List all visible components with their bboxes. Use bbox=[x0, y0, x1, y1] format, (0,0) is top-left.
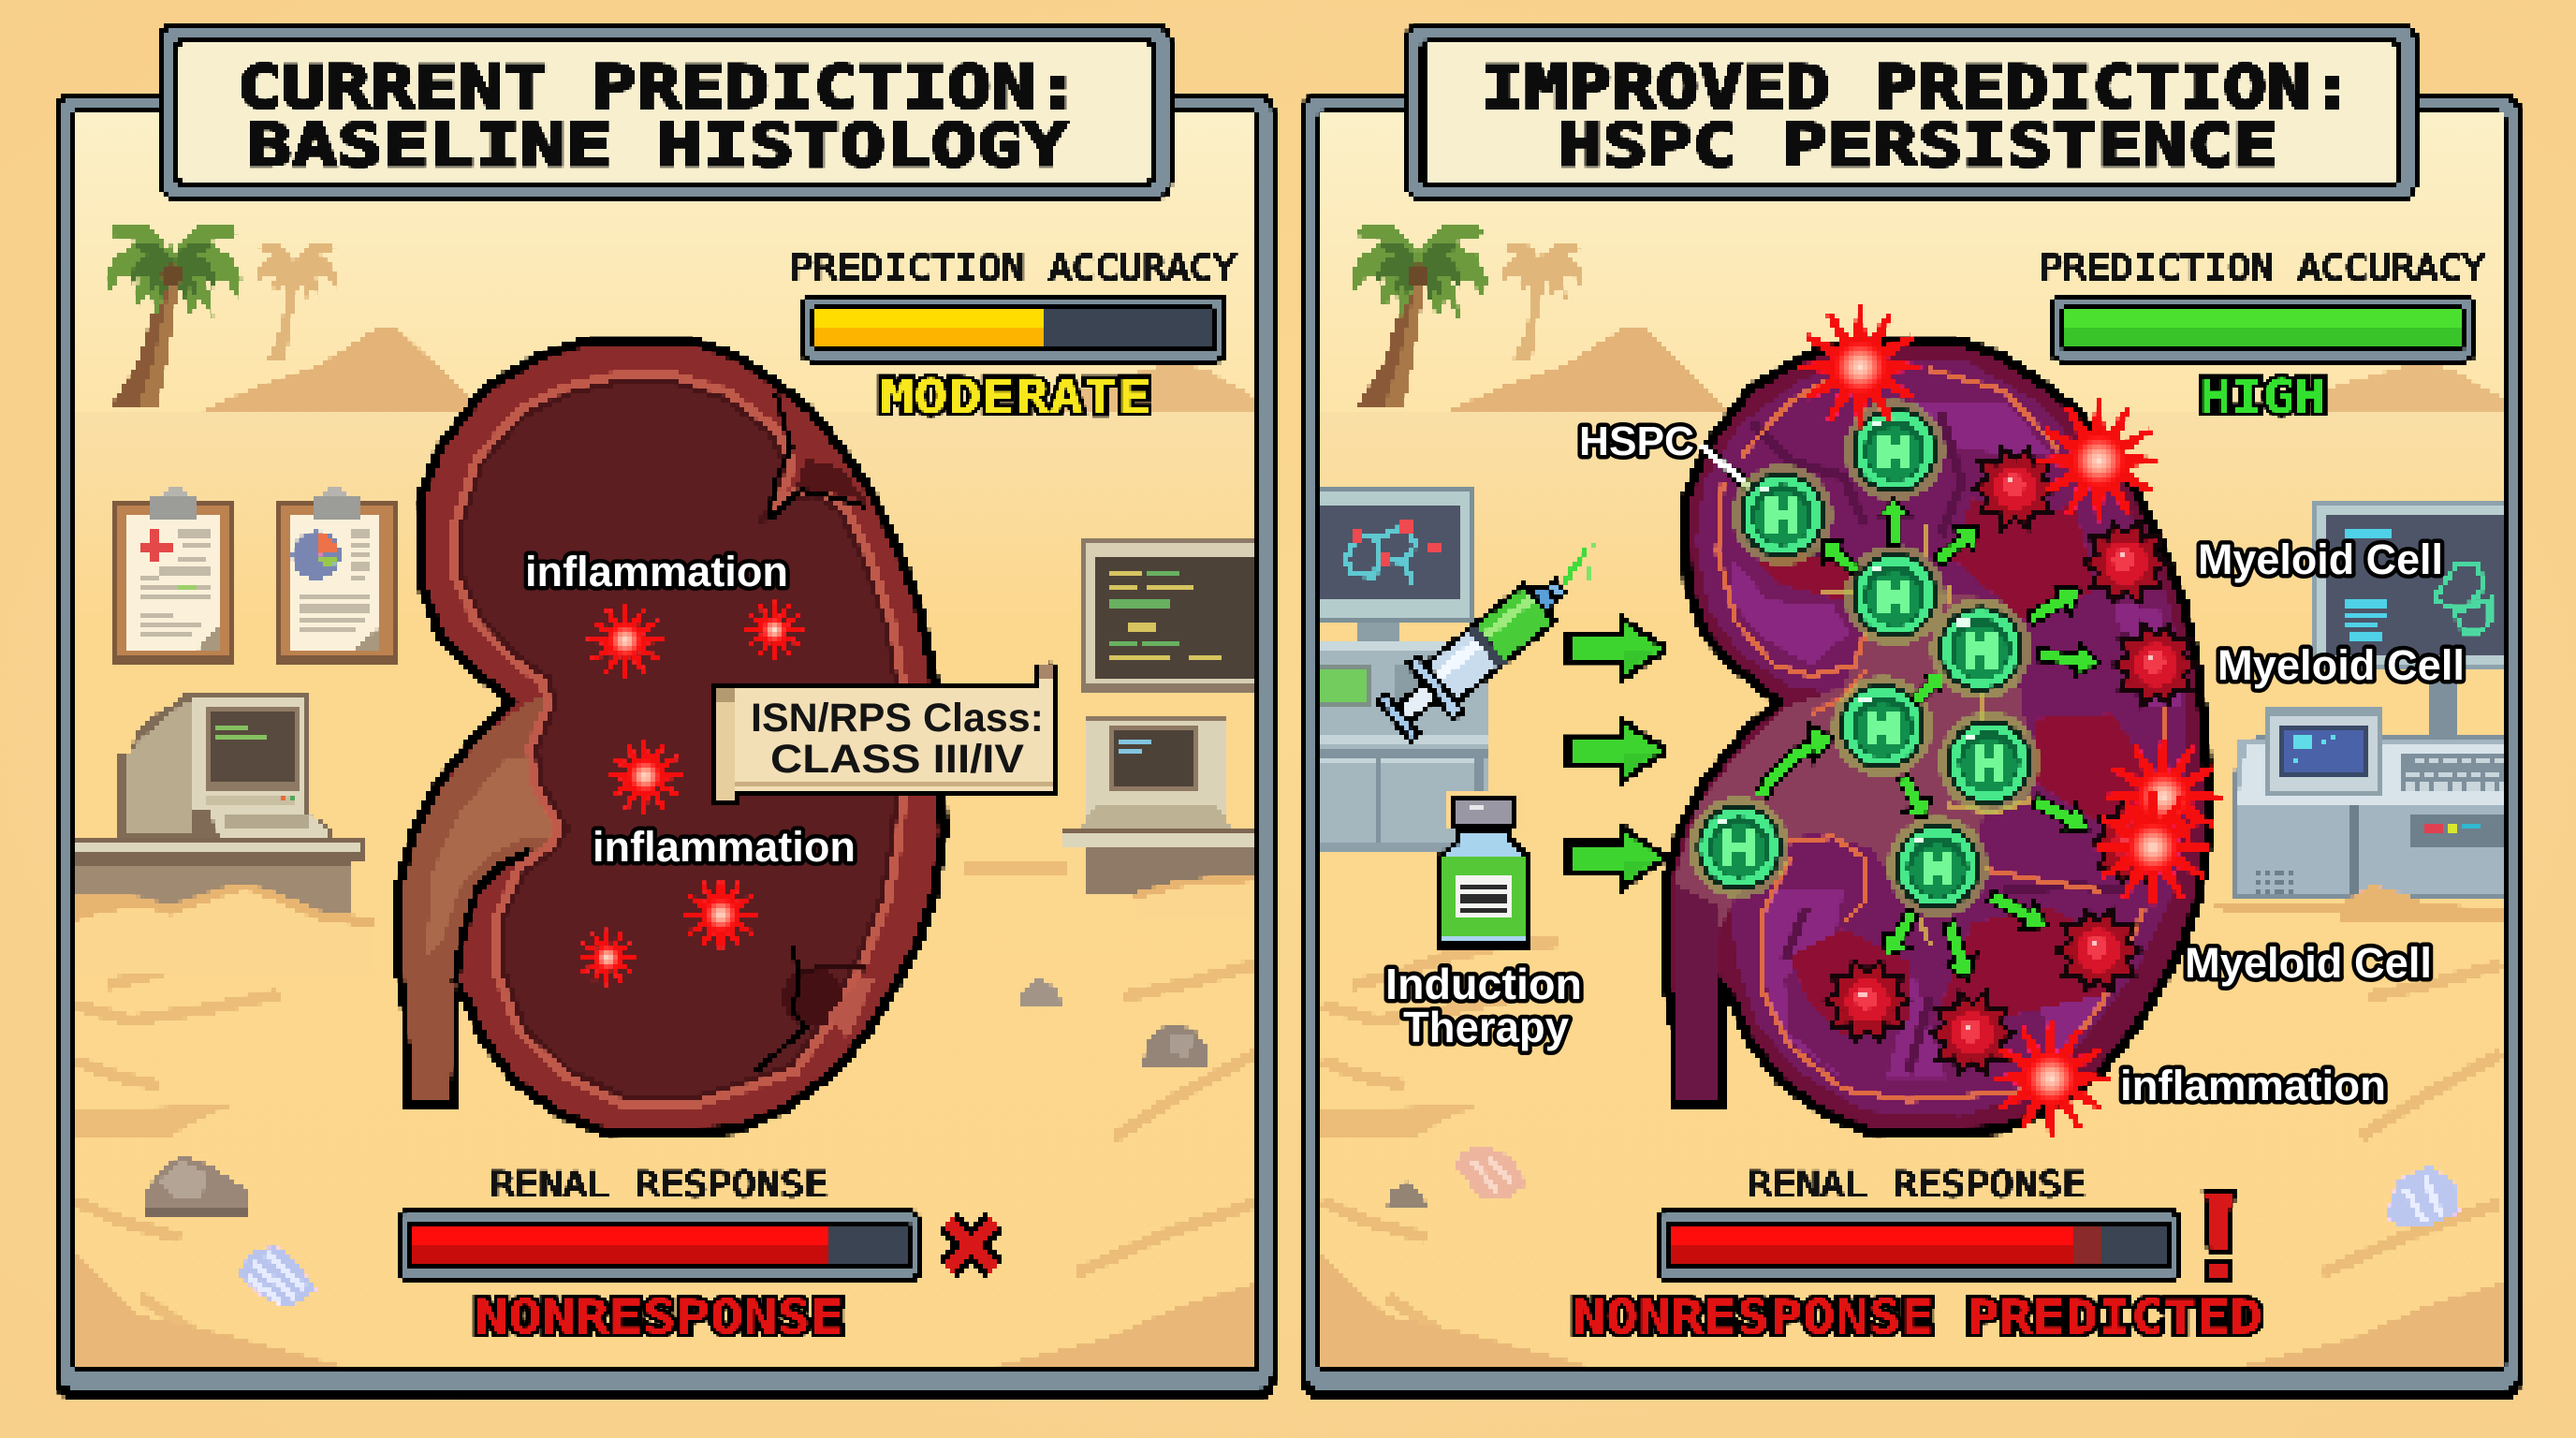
HSPC line highlight bbox=[1701, 445, 1755, 492]
label: prediction accuracy: PREDICTION ACCURACY bbox=[790, 248, 1237, 288]
icon: lab monitor with molecule bbox=[1322, 489, 1488, 851]
callout: ISN/RPS class scroll bbox=[710, 662, 1059, 807]
icon: blue shell bbox=[238, 1246, 316, 1308]
status: moderate: MODERATE bbox=[880, 370, 1151, 424]
desert and lab scene bbox=[1322, 114, 2502, 1368]
title: improved prediction bbox=[1481, 53, 2354, 180]
status: nonresponse: NONRESPONSE bbox=[475, 1290, 844, 1344]
panel: improved prediction bbox=[1300, 22, 2522, 1401]
label: inflammation lower: inflammation bbox=[593, 823, 856, 871]
icon: pink shell bbox=[1455, 1144, 1528, 1198]
inflammation bursts bbox=[1799, 306, 2221, 1137]
callout text: ISN/RPS class: ISN/RPS Class: bbox=[751, 696, 1044, 741]
panel: current prediction bbox=[54, 22, 1276, 1401]
panel frame bbox=[54, 92, 1276, 1401]
labels: current prediction bbox=[525, 548, 1044, 871]
icon: blue shell bbox=[2385, 1166, 2460, 1228]
title: current prediction: BASELINE HISTOLOGY bbox=[246, 111, 1068, 180]
icon: small retro computer on desk bbox=[964, 716, 1254, 899]
label: inflammation: inflammation bbox=[2120, 1062, 2386, 1109]
dark mottling bbox=[1752, 413, 2144, 1074]
header: improved prediction bbox=[1403, 22, 2419, 202]
central pelvis bbox=[1675, 590, 2027, 929]
label: myeloid cell three: Myeloid Cell bbox=[2185, 939, 2432, 987]
icon: distant palm tree bbox=[256, 242, 337, 359]
icon: small rock bbox=[1387, 1181, 1427, 1206]
icon: rock right bbox=[1143, 1025, 1208, 1067]
arrows: therapy into kidney bbox=[1568, 618, 1663, 888]
crimson regions bbox=[1758, 498, 2144, 1035]
renal response bar: nonresponse predicted bbox=[1655, 1209, 2182, 1283]
status: high: HIGH bbox=[2200, 370, 2326, 424]
labels: improved prediction bbox=[1385, 418, 2465, 1109]
icon: rock bbox=[143, 1154, 246, 1217]
title: improved prediction: IMPROVED PREDICTION: bbox=[1481, 53, 2354, 122]
icon: code monitor bbox=[1080, 536, 1258, 693]
desert scene bbox=[75, 114, 1258, 1368]
renal pelvis bbox=[404, 695, 567, 1098]
kidney interior bbox=[1696, 359, 2188, 1116]
renal response bar: nonresponse bbox=[396, 1209, 921, 1283]
upper crack bbox=[768, 393, 866, 520]
HSPC line outline bbox=[1701, 445, 1755, 492]
icon: distant palm tree bbox=[1501, 242, 1583, 359]
label: renal response: RENAL RESPONSE bbox=[1748, 1165, 2086, 1205]
label: prediction accuracy: PREDICTION ACCURACY bbox=[2040, 248, 2485, 288]
label: HSPC: HSPC bbox=[1579, 418, 1694, 464]
label: induction therapy: Therapy bbox=[1403, 1003, 1569, 1051]
icon: palm tree bbox=[105, 223, 242, 406]
label: myeloid cell two: Myeloid Cell bbox=[2217, 641, 2465, 689]
prediction accuracy bar: high bbox=[2050, 293, 2476, 363]
icon: lab computer station bbox=[2209, 499, 2502, 922]
label: inflammation upper: inflammation bbox=[525, 548, 788, 595]
inflammation markers bbox=[578, 601, 803, 987]
pixel text layer bbox=[237, 53, 2485, 1344]
status: nonresponse predicted: NONRESPONSE PREDICTED bbox=[1573, 1290, 2262, 1344]
lower crack bbox=[755, 947, 875, 1071]
label: induction therapy: Induction bbox=[1385, 960, 1582, 1008]
title: current prediction: CURRENT PREDICTION: bbox=[237, 53, 1080, 122]
prediction accuracy bar: moderate bbox=[800, 293, 1228, 363]
orange vessels bbox=[1718, 370, 2166, 1100]
title: current prediction bbox=[237, 53, 1080, 180]
icon: exclamation mark bbox=[2202, 1187, 2236, 1284]
HSPC stem cells bbox=[1689, 400, 2040, 917]
differentiation arrows bbox=[1761, 499, 2102, 986]
callout text: ISN/RPS class bbox=[751, 696, 1044, 782]
kidney: HSPC persistence bbox=[1665, 306, 2221, 1137]
label: myeloid cell one: Myeloid Cell bbox=[2198, 536, 2443, 583]
icon: medicine vial bbox=[1436, 789, 1532, 948]
label: renal response: RENAL RESPONSE bbox=[490, 1165, 828, 1205]
header: current prediction bbox=[157, 22, 1173, 202]
myeloid cells bbox=[1821, 443, 2203, 1078]
icon: syringe bbox=[1371, 541, 1595, 749]
purple medulla patches bbox=[1731, 402, 2182, 1078]
title: improved prediction: HSPC PERSISTENCE bbox=[1558, 111, 2277, 180]
icon: clipboard with pie chart bbox=[274, 488, 397, 665]
icon: clipboard with medical cross bbox=[113, 488, 236, 665]
icon: small rock bbox=[1020, 978, 1062, 1006]
panel frame bbox=[1300, 92, 2522, 1401]
kidney: baseline histology bbox=[400, 340, 944, 1135]
icon: retro computer on desk bbox=[75, 692, 374, 974]
callout text: ISN/RPS class: CLASS III/IV bbox=[770, 737, 1024, 782]
icon: red x bbox=[948, 1223, 994, 1268]
label: induction therapy bbox=[1385, 960, 1582, 1051]
tan connecting vessels bbox=[1822, 525, 2031, 945]
icon: palm tree bbox=[1351, 223, 1487, 406]
